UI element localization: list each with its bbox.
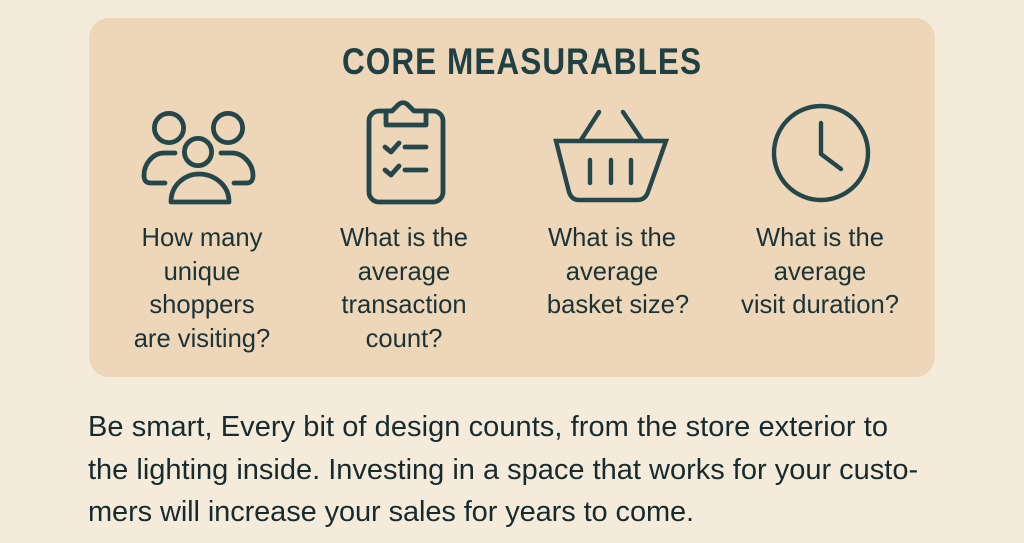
panel: core measurables <box>89 18 935 377</box>
label: visit duration: What is the <box>756 224 884 252</box>
label: transaction count <box>340 224 468 353</box>
closing paragraph: mers will increase your sales for years to come. <box>88 496 694 528</box>
icon: shopping basket <box>556 112 666 200</box>
label: unique shoppers: unique <box>164 258 240 286</box>
label: unique shoppers: shoppers <box>149 291 255 319</box>
label: unique shoppers: are visiting? <box>134 325 270 353</box>
icon: group of shoppers <box>144 113 253 202</box>
label: visit duration: average <box>774 258 866 286</box>
label: visit duration: visit duration? <box>741 291 899 319</box>
label: transaction count: transaction <box>341 291 467 319</box>
label: basket size: basket size? <box>547 291 689 319</box>
title: CORE MEASURABLES <box>341 41 702 82</box>
label: unique shoppers <box>134 224 270 353</box>
label: basket size <box>547 224 689 319</box>
icon: clock <box>774 106 868 200</box>
label: basket size: average <box>566 258 658 286</box>
closing paragraph <box>88 411 918 528</box>
label: transaction count: count? <box>366 325 442 353</box>
label: transaction count: average <box>358 258 450 286</box>
label: unique shoppers: How many <box>142 224 262 252</box>
closing paragraph: Be smart, Every bit of design counts, from the store exterior to <box>88 411 888 443</box>
icon: clipboard checklist <box>369 103 443 202</box>
closing paragraph: the lighting inside. Investing in a space that works for your custo- <box>88 454 918 486</box>
label: visit duration <box>741 224 899 319</box>
label: transaction count: What is the <box>340 224 468 252</box>
label: basket size: What is the <box>548 224 676 252</box>
